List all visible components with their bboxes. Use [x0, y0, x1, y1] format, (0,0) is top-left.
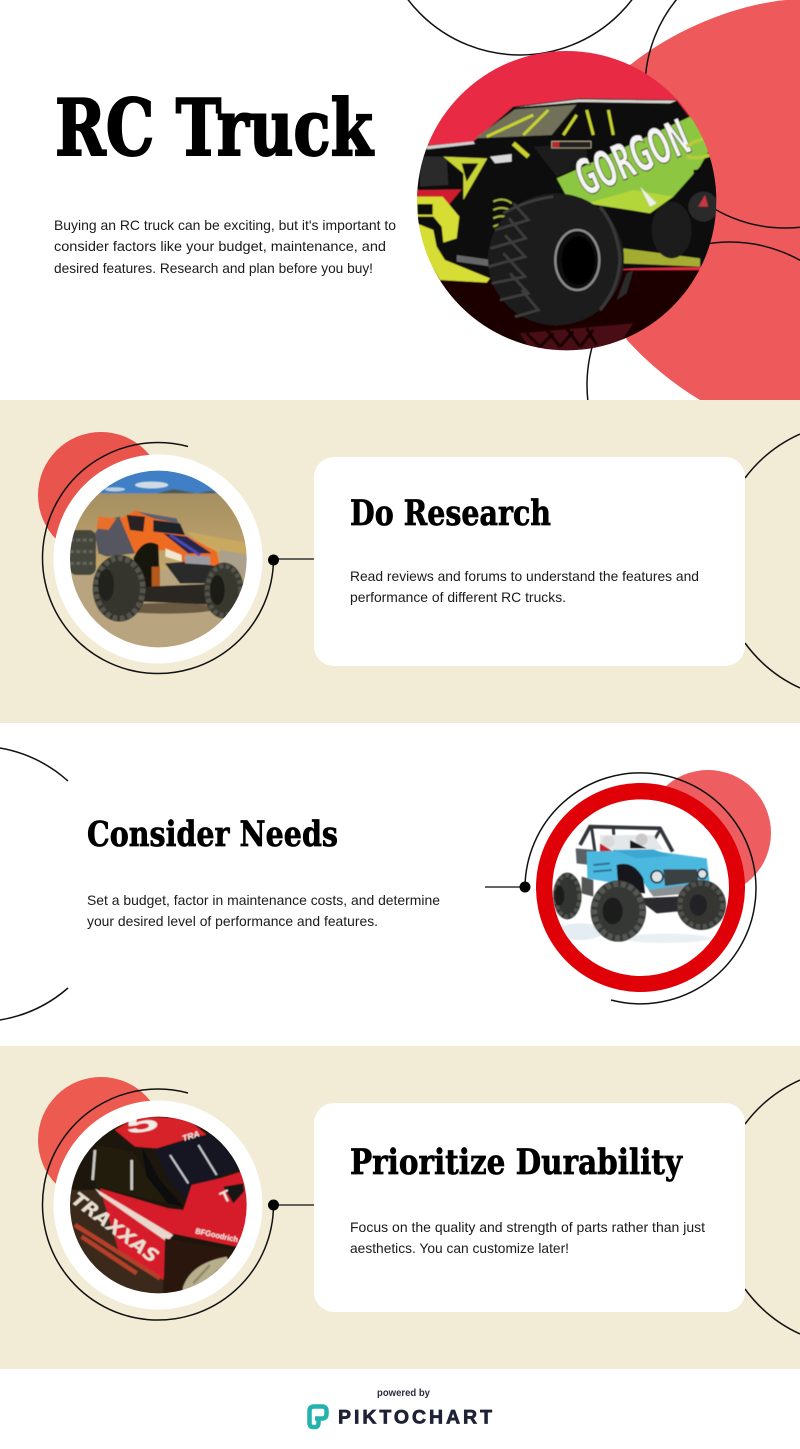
red accent circle	[645, 770, 771, 896]
body text	[350, 568, 699, 605]
photo: blue truck	[552, 799, 729, 976]
connector with dot	[268, 1200, 314, 1210]
body text: Read reviews and forums to understand the features and	[350, 568, 699, 584]
panel: do research	[0, 400, 800, 723]
photo: orange truck	[67, 467, 250, 650]
card	[314, 457, 745, 666]
hero description: desired features. Research and plan before you buy!	[54, 260, 373, 276]
panel: consider needs	[0, 748, 771, 1020]
powered by label: powered by	[377, 1387, 430, 1399]
heading: Consider Needs	[87, 814, 338, 855]
panel: prioritize durability	[0, 1046, 800, 1369]
orbit arc	[525, 773, 756, 1004]
hero outline circles	[407, 0, 800, 400]
photo: red truck: T	[218, 1187, 234, 1207]
photo: red truck	[67, 1109, 250, 1297]
body text	[350, 1219, 705, 1256]
body text: Focus on the quality and strength of parts rather than just	[350, 1219, 705, 1235]
heading: Prioritize Durability	[350, 1142, 683, 1183]
white photo ring	[54, 454, 262, 664]
footer: powered by piktochart	[310, 1387, 492, 1428]
right edge arc	[745, 1080, 800, 1334]
connector with dot	[268, 554, 314, 566]
traxxas lettering: TRAXXAS	[67, 1189, 162, 1268]
body text: your desired level of performance and features.	[87, 913, 378, 929]
white photo ring	[54, 1100, 262, 1310]
heading: Do Research	[350, 493, 551, 534]
hero decorative coral circle	[560, 0, 800, 400]
body text: aesthetics. You can customize later!	[350, 1240, 569, 1256]
red photo ring	[536, 783, 745, 992]
piktochart wordmark: PIKTOCHART	[338, 1406, 492, 1428]
left edge arcs	[0, 748, 68, 1020]
photo: red truck: TRA	[181, 1129, 201, 1144]
hero title: RC Truck	[55, 83, 375, 174]
orbit arc	[43, 443, 274, 674]
goodrich label: BFGoodrich	[195, 1226, 239, 1244]
icon: piktochart logo	[310, 1406, 326, 1427]
connector with dot	[485, 882, 530, 892]
body text	[87, 892, 440, 929]
number on roof: 5	[124, 1109, 161, 1140]
red accent circle	[38, 1077, 164, 1203]
hero description: Buying an RC truck can be exciting, but it's important to	[54, 217, 396, 233]
hero photo: monster truck	[413, 47, 720, 357]
hero description	[54, 217, 396, 276]
hero description: consider factors like your budget, maintenance, and	[54, 238, 386, 254]
red accent circle	[38, 432, 164, 558]
body text: Set a budget, factor in maintenance costs, and determine	[87, 892, 440, 908]
card	[314, 1103, 745, 1312]
orbit arc	[43, 1089, 274, 1320]
right edge arc	[745, 434, 800, 688]
body text: performance of different RC trucks.	[350, 589, 566, 605]
panel: hero	[54, 0, 800, 400]
